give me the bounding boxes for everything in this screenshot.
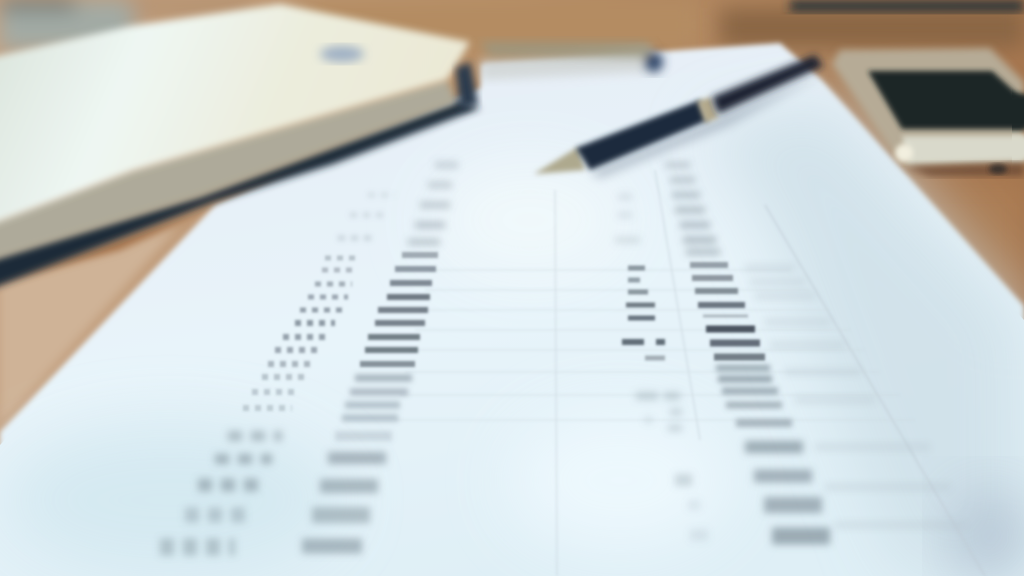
phone screen <box>868 71 1024 129</box>
phone side button <box>989 164 1007 174</box>
pen shadow <box>590 72 826 178</box>
notebook cover <box>0 4 470 226</box>
right striped column shading <box>745 268 965 525</box>
column of figures: centre right, mid focus <box>716 368 792 423</box>
column of figures: centre left <box>360 255 438 364</box>
column of figures: centre left, top <box>408 165 458 242</box>
notebook <box>0 4 480 290</box>
notebook page edges <box>0 80 457 262</box>
column of figures: centre, out of focus <box>615 197 708 535</box>
phone screen edge fill <box>1012 94 1024 129</box>
notebook shadow <box>0 100 480 290</box>
pen tip <box>534 147 585 174</box>
phone home button <box>895 144 913 162</box>
pen barrel <box>712 55 823 114</box>
phone lower bezel <box>902 136 1024 164</box>
notebook spine <box>456 62 478 110</box>
column of figures: centre right <box>690 265 765 357</box>
faint table rules <box>395 170 985 576</box>
column of figures: centre <box>622 268 665 358</box>
pen band <box>697 97 718 123</box>
column of figures: centre right, out of focus <box>745 447 830 536</box>
column of figures: far left, out of focus <box>160 436 282 547</box>
clip at the top of the sheet <box>480 42 663 72</box>
column of figures: centre right, top <box>665 165 720 252</box>
phone body <box>832 48 1024 166</box>
pen <box>534 55 826 178</box>
column of figures: far left, top <box>338 195 395 238</box>
column of figures: far left <box>243 258 360 408</box>
dark object at top right <box>790 0 1024 12</box>
top left blurred desk item <box>0 0 250 50</box>
phone shadow <box>905 163 1024 176</box>
pen body <box>576 100 708 170</box>
phone bezel edge fill <box>1012 136 1024 160</box>
smartphone <box>832 48 1024 176</box>
column of figures: centre left, out of focus <box>302 458 386 546</box>
notebook label <box>320 46 364 62</box>
column of figures: centre left, mid focus <box>335 378 412 436</box>
